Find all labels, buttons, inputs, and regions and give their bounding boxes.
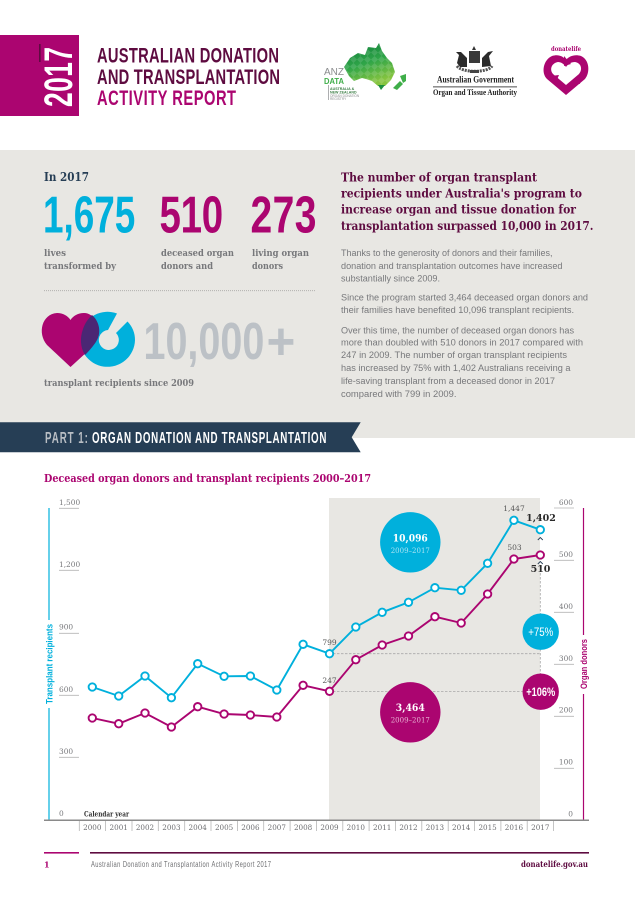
text block: body copy: substantially since 2009. (341, 274, 440, 284)
callout: +106% (522, 674, 559, 710)
heading: In 2017: In 2017 (44, 170, 89, 184)
x axis: calendar years: 2004 (189, 823, 207, 832)
logo: ANZDATA: DATA (324, 76, 344, 86)
right axis: organ donors: 400 (559, 602, 573, 611)
x axis: calendar years (44, 810, 589, 832)
report title: AND TRANSPLANTATION (97, 65, 280, 89)
logo: ANZDATA (324, 43, 406, 101)
chart title: Deceased organ donors and transplant recipients 2000–2017 (44, 472, 371, 485)
statistic: 510 deceased donors (160, 186, 234, 272)
callout: +75% (522, 614, 559, 650)
logo: ANZDATA: ORGAN DONATION (330, 94, 360, 98)
callout: 3,464 donors: 3,464 (396, 702, 425, 714)
footer: Australian Donation and Transplantation Activity Report 2017 (91, 861, 271, 869)
x axis: calendar years: Calendar year (84, 810, 129, 818)
right axis: organ donors: 500 (559, 550, 573, 559)
data labels: 799 (322, 638, 337, 647)
callout: 10,096 recipients: 10,096 (393, 532, 428, 544)
logo: ANZDATA: AUSTRALIA & (330, 87, 355, 91)
data labels: 247 (322, 676, 337, 685)
footer (44, 852, 589, 870)
right axis: organ donors: 600 (559, 498, 573, 507)
text block: headline: recipients under Australia's program to (341, 187, 582, 201)
panel: in 2017 statistics (42, 170, 316, 389)
caption: transplant recipients since 2009: transplant recipients since 2009 (44, 378, 194, 389)
statistic: 273 living donors: living organ (252, 248, 309, 259)
year badge (0, 35, 81, 116)
footer: 1 (44, 860, 50, 870)
x axis: calendar years: 2013 (426, 823, 444, 832)
statistic: 273 living donors: 273 (250, 185, 316, 244)
section banner: ORGAN DONATION AND TRANSPLANTATION (92, 429, 326, 447)
series: organ donors (89, 551, 544, 731)
callout: 10,096 recipients: 2009–2017 (391, 547, 430, 555)
right axis: organ donors: 0 (568, 810, 573, 818)
right axis: organ donors: 300 (559, 654, 573, 663)
text block: body copy: life-saving transplant from a deceased donor in 2017 (341, 376, 555, 387)
callout: +75%: +75% (528, 625, 553, 639)
statistic: 1,675 lives: lives (44, 248, 66, 259)
line chart (44, 498, 589, 832)
text block: body copy: 247 in 2009. The number of organ transplant recipients (341, 350, 567, 361)
x axis: calendar years: 2001 (110, 823, 128, 832)
callout: +106%: +106% (526, 685, 555, 699)
text block: body copy: donation and transplantation outcomes have increased (341, 261, 562, 272)
statistic: 273 living donors: donors (252, 261, 283, 272)
year badge: 2017 (37, 47, 81, 107)
text block: body copy: their families have benefited 10,096 transplant recipients. (341, 305, 574, 316)
statistic: 10,000+: + (266, 312, 295, 370)
x axis: calendar years: 2005 (215, 823, 234, 832)
left axis: transplant recipients: 1,200 (59, 560, 80, 569)
statistic: 273 living donors (250, 185, 316, 272)
panel: grey summary background (0, 150, 635, 438)
section banner: PART 1: (45, 429, 88, 447)
x axis: calendar years: 2003 (162, 823, 181, 832)
x axis: calendar years: 2002 (136, 823, 154, 832)
left axis: transplant recipients: 600 (59, 685, 73, 694)
text block: body copy: Since the program started 3,464 deceased organ donors and (341, 293, 588, 304)
statistic: 1,675 lives (43, 185, 135, 272)
statistic: 1,675 lives: 1,675 (43, 185, 135, 244)
left axis: transplant recipients: 0 (59, 809, 64, 818)
text block: body copy: Thanks to the generosity of donors and their families, (341, 248, 552, 259)
callout: 10,096 recipients (380, 512, 440, 572)
logo: ANZDATA: REGISTRY (330, 97, 347, 101)
x axis: calendar years: 2017 (531, 823, 550, 832)
x axis: calendar years: 2007 (268, 823, 286, 832)
logo: Australian Government: Organ and Tissue Authority (433, 88, 518, 97)
text block: body copy (341, 248, 588, 400)
left axis: transplant recipients: 300 (59, 747, 73, 756)
left axis: transplant recipients (44, 498, 80, 820)
x axis: calendar years: 2008 (294, 823, 313, 832)
right axis: organ donors: 100 (559, 758, 573, 766)
statistic: 510 deceased donors: donors and (161, 261, 213, 272)
logo: Australian Government (433, 46, 518, 97)
text block: headline: The number of organ transplant (341, 170, 537, 184)
left axis: transplant recipients: 900 (59, 622, 73, 632)
text block: body copy: compared with 799 in 2009. (341, 389, 456, 400)
highlighted period 2009-2017 (329, 498, 540, 820)
series: transplant recipients (89, 517, 544, 701)
text block: headline: transplantation surpassed 10,000 in 2017. (341, 219, 594, 233)
x axis: calendar years: 2000 (83, 823, 102, 832)
report title: ACTIVITY REPORT (97, 86, 236, 110)
left axis: transplant recipients: Transplant recipients (44, 624, 54, 704)
x axis: calendar years: 2010 (347, 823, 365, 832)
statistic: 10,000+: 10,000 (144, 312, 264, 370)
text block: body copy: Over this time, the number of deceased organ donors has (341, 325, 574, 336)
statistic: 510 deceased donors: 510 (160, 186, 223, 244)
right axis: organ donors (554, 498, 589, 820)
data labels: 1,402 (526, 513, 556, 524)
x axis: calendar years: 2012 (399, 823, 418, 832)
data labels (322, 504, 556, 685)
x axis: calendar years: 2009 (320, 823, 339, 832)
icon: heart and ring (42, 312, 135, 367)
text block: body copy: more than doubled with 510 donors in 2017 compared with (341, 338, 583, 348)
logo: donatelife (544, 46, 588, 95)
logo: Australian Government: Australian Government (437, 74, 514, 84)
logo: donatelife: donatelife (551, 46, 581, 53)
footer: donatelife.gov.au (521, 859, 588, 869)
text block: headline (341, 170, 594, 233)
report title: AUSTRALIAN DONATION (97, 44, 279, 67)
section banner (0, 422, 361, 452)
data labels: 503 (507, 543, 522, 552)
callout: 3,464 donors: 2009–2017 (391, 716, 430, 724)
data labels: 1,447 (503, 504, 525, 513)
x axis: calendar years: 2006 (241, 823, 260, 832)
report title (97, 44, 280, 110)
logo: ANZDATA: ANZ (324, 66, 345, 78)
x axis: calendar years: 2015 (478, 823, 497, 832)
callout: 3,464 donors (380, 682, 440, 742)
x axis: calendar years: 2016 (505, 823, 523, 832)
x axis: calendar years: 2014 (452, 823, 471, 832)
statistic: 510 deceased donors: deceased organ (161, 248, 234, 259)
data labels: 510 (531, 564, 551, 575)
statistic: 1,675 lives: transformed by (44, 261, 116, 272)
logo: ANZDATA: NEW ZEALAND (330, 90, 357, 94)
text block: headline: increase organ and tissue donation for (341, 203, 577, 217)
right axis: organ donors: 200 (559, 706, 573, 714)
left axis: transplant recipients: 1,500 (59, 498, 80, 507)
right axis: organ donors: Organ donors (579, 639, 589, 689)
text block: body copy: has increased by 75% with 1,402 Australians receiving a (341, 363, 571, 374)
x axis: calendar years: 2011 (373, 823, 391, 832)
